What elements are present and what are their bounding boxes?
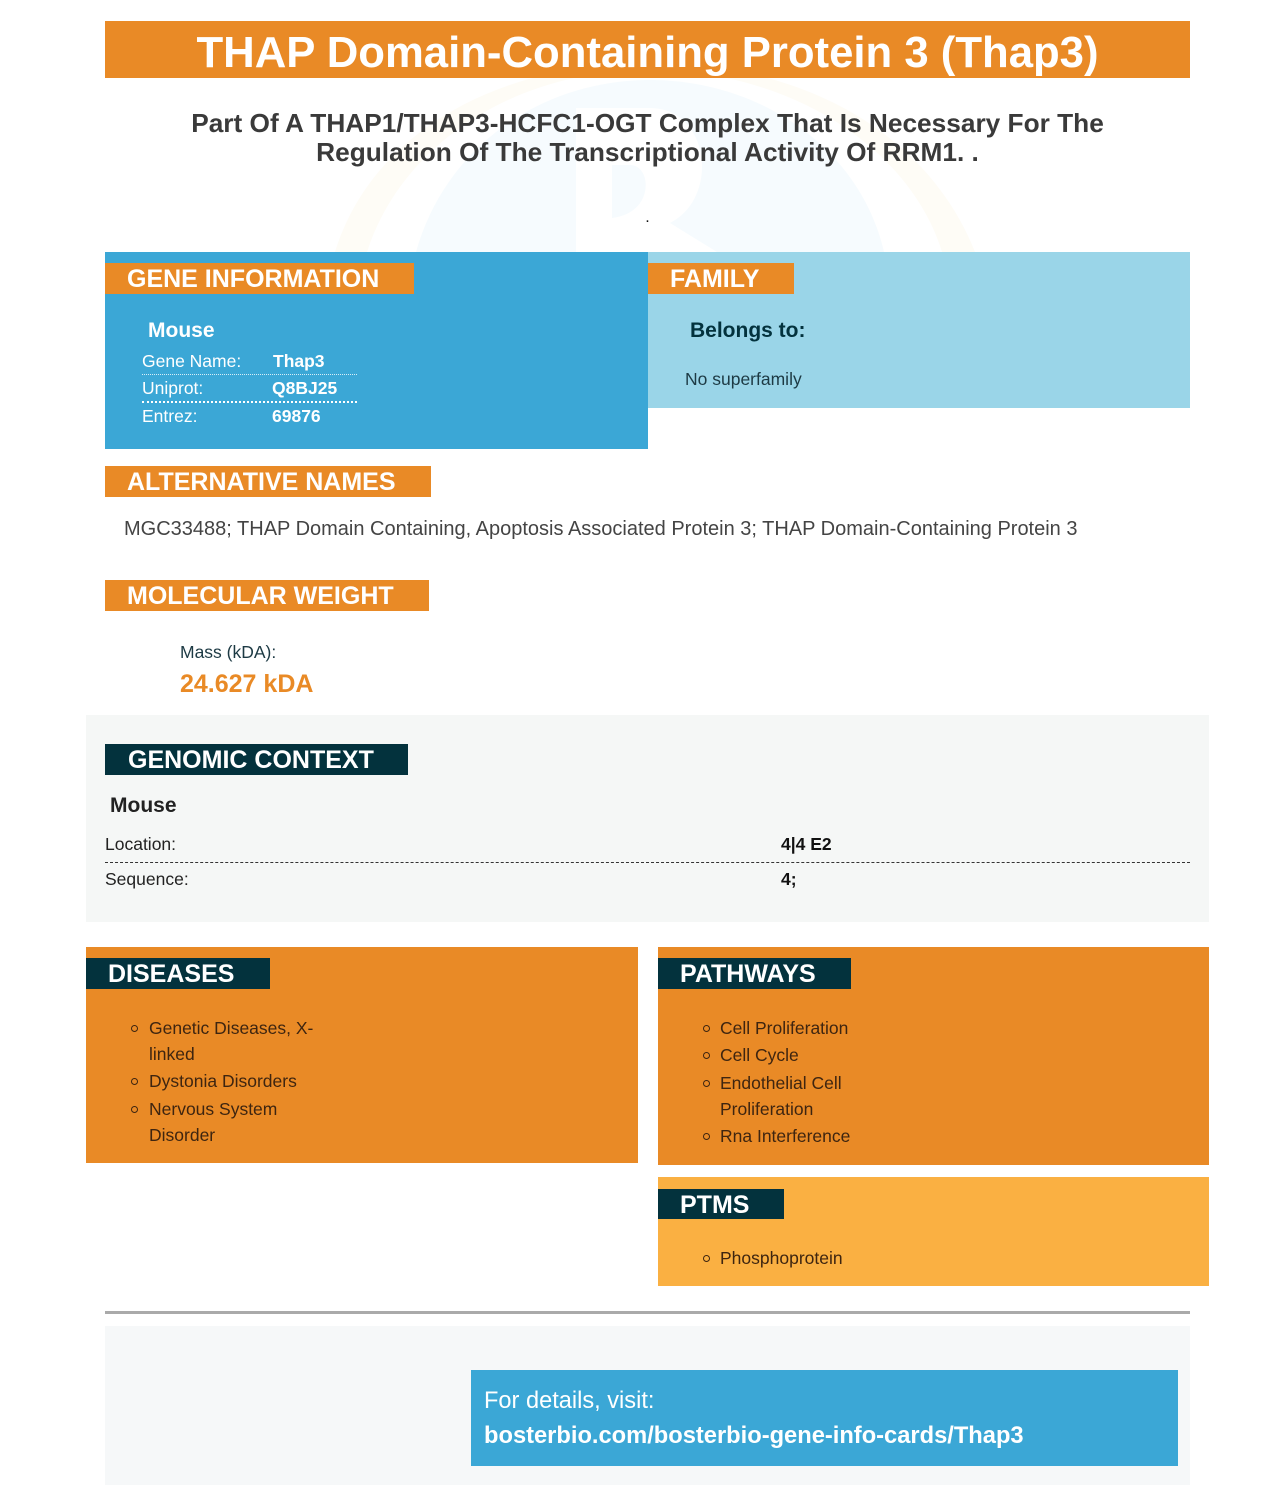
uniprot row <box>142 377 357 403</box>
title banner: THAP Domain-Containing Protein 3 (Thap3) <box>196 28 1099 77</box>
heading: gene information: GENE INFORMATION <box>127 265 379 293</box>
callout: details link <box>471 1370 1178 1466</box>
panel: ptms <box>658 1177 1209 1286</box>
heading: genomic context: GENOMIC CONTEXT <box>128 746 374 774</box>
species label: Mouse <box>110 794 177 817</box>
heading: pathways: PATHWAYS <box>680 960 816 988</box>
callout url: bosterbio.com/bosterbio-gene-info-cards/Thap3 <box>484 1423 1024 1449</box>
disease list: Dystonia Disorders <box>149 1071 297 1091</box>
callout label: For details, visit: <box>484 1388 654 1414</box>
uniprot row: Uniprot: <box>142 378 203 398</box>
heading: diseases: DISEASES <box>108 960 234 988</box>
subtitle: Regulation Of The Transcriptional Activity Of RRM1. . <box>316 137 979 167</box>
small dot text: . <box>645 209 650 226</box>
heading: alternative names: ALTERNATIVE NAMES <box>127 468 396 496</box>
location row: Location: <box>105 834 176 854</box>
heading: ptms <box>658 1189 784 1219</box>
pathway list: Cell Cycle <box>720 1045 799 1065</box>
belongs to label: Belongs to: <box>690 319 806 342</box>
entrez row: 69876 <box>272 406 321 426</box>
alternative names text: MGC33488; THAP Domain Containing, Apoptosis Associated Protein 3; THAP Domain-Containing Protein 3 <box>124 518 1078 540</box>
sequence row: 4; <box>781 869 797 889</box>
subtitle: Part Of A THAP1/THAP3-HCFC1-OGT Complex That Is Necessary For The <box>191 108 1104 138</box>
panel: genomic context <box>86 715 1209 922</box>
pathway list: Rna Interference <box>720 1126 850 1146</box>
heading: molecular weight: MOLECULAR WEIGHT <box>127 582 394 610</box>
location row: 4|4 E2 <box>781 834 832 854</box>
disease list: Genetic Diseases, X- <box>149 1018 313 1038</box>
sequence row <box>105 869 797 889</box>
disease list: linked <box>149 1044 195 1064</box>
entrez row: Entrez: <box>142 406 197 426</box>
pathway list: Endothelial Cell <box>720 1073 842 1093</box>
heading: family: FAMILY <box>670 265 759 293</box>
disease list <box>131 1018 313 1145</box>
heading: diseases <box>86 958 270 989</box>
watermark logo <box>336 78 974 252</box>
pathway list: Cell Proliferation <box>720 1018 848 1038</box>
footer panel <box>105 1326 1190 1485</box>
location row <box>105 833 1190 863</box>
mass label: Mass (kDA): <box>180 642 276 662</box>
gene name row: Gene Name: <box>142 351 241 371</box>
heading: family <box>648 263 794 294</box>
entrez row <box>142 406 321 426</box>
species label: Mouse <box>148 319 215 342</box>
heading: pathways <box>658 958 851 989</box>
superfamily text: No superfamily <box>685 369 802 389</box>
subtitle <box>191 108 1104 167</box>
disease list: Disorder <box>149 1125 215 1145</box>
uniprot row: Q8BJ25 <box>272 378 337 398</box>
panel: diseases <box>86 947 638 1163</box>
sequence row: Sequence: <box>105 869 189 889</box>
panel: pathways <box>658 947 1209 1165</box>
heading: ptms: PTMS <box>680 1191 749 1219</box>
panel: family <box>648 252 1190 408</box>
pathway list <box>703 1018 850 1146</box>
mass value: 24.627 kDA <box>180 670 313 698</box>
panel: gene information <box>105 252 648 449</box>
horizontal rule <box>105 1311 1190 1314</box>
gene name row: Thap3 <box>273 351 325 371</box>
gene name row <box>142 350 357 375</box>
ptm list: Phosphoprotein <box>720 1248 843 1268</box>
pathway list: Proliferation <box>720 1099 813 1119</box>
disease list: Nervous System <box>149 1099 277 1119</box>
